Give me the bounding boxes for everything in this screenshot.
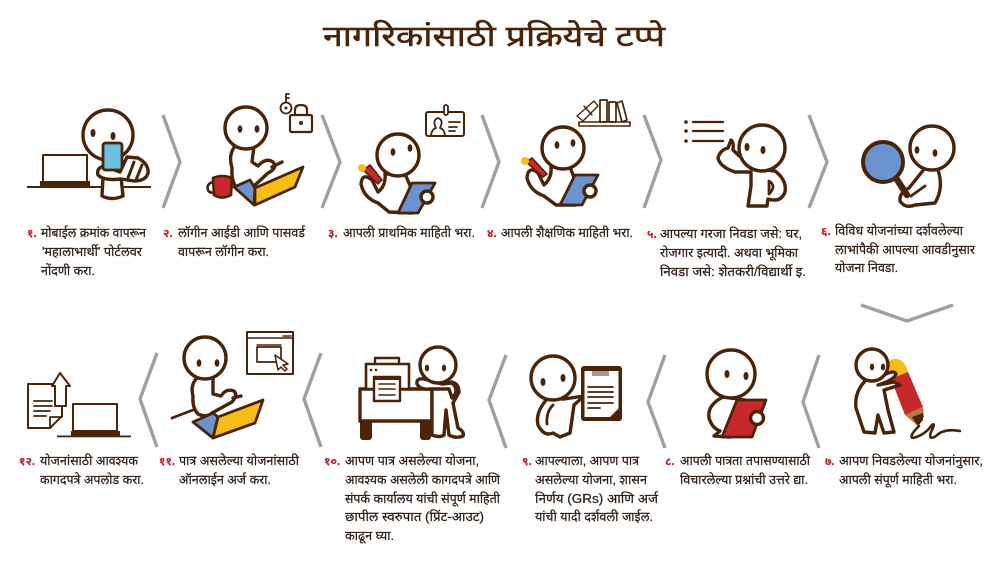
text: step 1 bbox=[27, 225, 147, 278]
icon: step 2 person with laptop, cup, key and lock bbox=[208, 94, 312, 205]
text: step 10: काढून घ्या. bbox=[345, 528, 394, 544]
text: step 11 bbox=[159, 453, 300, 487]
text: step 1: १. bbox=[27, 228, 37, 240]
icon: step 7 person with giant pencil bbox=[856, 349, 960, 438]
text: step 1: नोंदणी करा. bbox=[41, 263, 95, 278]
arrow: step 5 to 6 bbox=[809, 115, 827, 208]
icon: step 3 person with pencil, tablet, id card bbox=[358, 105, 464, 213]
text: step 1: मोबाईल क्रमांक वापरून bbox=[41, 225, 147, 240]
icon: step 12 document upload to laptop bbox=[28, 373, 131, 437]
icon: step 11 person at laptop with browser window bbox=[172, 332, 293, 438]
text: step 11: ११. bbox=[159, 456, 175, 468]
text: step 6: योजना निवडा. bbox=[835, 260, 898, 275]
icon: step 1 person with phone and laptop bbox=[27, 110, 151, 198]
text: step 9: असलेल्या योजना, शासन bbox=[535, 472, 648, 487]
arrow: step 7 to 8 bbox=[803, 355, 819, 448]
text: step 5: आपल्या गरजा निवडा जसे: घर, bbox=[660, 226, 802, 241]
text: step 4: ४. bbox=[487, 228, 497, 240]
text: step 1: 'महालाभार्थी' पोर्टलवर bbox=[42, 244, 143, 259]
text: step 2: वापरून लॉगीन करा. bbox=[178, 244, 269, 259]
text: step 7: ७. bbox=[825, 456, 835, 468]
arrow: step 4 to 5 bbox=[644, 115, 661, 208]
text: step 8: ८. bbox=[665, 456, 675, 468]
icon: step 5 person with list bbox=[684, 120, 785, 206]
text: step 2: लॉगीन आईडी आणि पासवर्ड bbox=[178, 225, 306, 240]
icon: step 10 person leaning on printer desk bbox=[360, 347, 463, 440]
text: step 11: ऑनलाईन अर्ज करा. bbox=[179, 472, 271, 487]
text: step 10: आपण पात्र असलेल्या योजना, bbox=[345, 453, 479, 468]
arrow: step 9 to 10 bbox=[489, 355, 506, 448]
text: step 11: पात्र असलेल्या योजनांसाठी bbox=[179, 453, 300, 468]
text: step 2 bbox=[163, 225, 306, 259]
icon: step 8 person with red tablet bbox=[707, 350, 766, 437]
text: step 5: निवडा जसे: शेतकरी/विद्यार्थी इ. bbox=[660, 264, 806, 279]
icon: step 9 person with clipboard bbox=[531, 356, 622, 437]
text: step 6 bbox=[821, 223, 976, 275]
text: step 5: रोजगार इत्यादी. अथवा भूमिका bbox=[660, 245, 799, 261]
text: step 7: आपली संपूर्ण माहिती भरा. bbox=[839, 472, 957, 488]
arrow: step 11 to 12 bbox=[140, 353, 157, 447]
icon: step 6 person with magnifier bbox=[863, 126, 954, 206]
text: step 6: ६. bbox=[821, 226, 831, 238]
text: step 9: यांची यादी दर्शवली जाईल. bbox=[535, 509, 653, 524]
text: step 8: विचारलेल्या प्रश्नांची उत्तरे द्या. bbox=[680, 472, 808, 487]
text: step 12 bbox=[19, 453, 144, 487]
text: step 9 bbox=[522, 453, 659, 524]
text: step 10: आवश्यक असलेली कागदपत्रे आणि bbox=[345, 472, 501, 487]
text: step 10: १०. bbox=[324, 456, 340, 468]
text: step 12: १२. bbox=[19, 456, 35, 468]
arrow: step 8 to 9 bbox=[648, 355, 665, 448]
text: step 4: आपली शैक्षणिक माहिती भरा. bbox=[501, 225, 633, 240]
arrow: step 6 down to 7 bbox=[861, 305, 953, 321]
arrow: step 2 to 3 bbox=[322, 115, 340, 208]
text: step 12: योजनांसाठी आवश्यक bbox=[40, 453, 139, 468]
text: step 9: निर्णय (GRs) आणि अर्ज bbox=[535, 491, 659, 506]
text: step 12: कागदपत्रे अपलोड करा. bbox=[40, 472, 144, 487]
text: step 7: आपण निवडलेल्या योजनांनुसार, bbox=[839, 453, 983, 469]
text: step 6: लाभांपैकी आपल्या आवडीनुसार bbox=[835, 242, 976, 258]
text: step 8: आपली पात्रता तपासण्यासाठी bbox=[680, 453, 811, 468]
text: step 9: ९. bbox=[522, 456, 532, 468]
text: step 10: छापील स्वरुपात (प्रिंट-आउट) bbox=[345, 509, 484, 524]
text: step 8 bbox=[665, 453, 811, 487]
arrow: step 1 to 2 bbox=[163, 115, 180, 208]
arrow: step 3 to 4 bbox=[482, 115, 499, 208]
text: step 5 bbox=[647, 226, 806, 279]
text: step 10 bbox=[324, 453, 501, 544]
icon: step 4 person with pencil, tablet, books bbox=[521, 100, 630, 205]
text: step 10: संपर्क कार्यालय यांची संपूर्ण माहिती bbox=[345, 491, 501, 507]
text: step 3: ३. bbox=[328, 228, 338, 240]
arrow: step 10 to 11 bbox=[304, 353, 321, 447]
text: step 3: आपली प्राथमिक माहिती भरा. bbox=[343, 225, 475, 240]
text: step 2: २. bbox=[163, 228, 173, 240]
text: step 7 bbox=[825, 453, 983, 488]
text: step 5: ५. bbox=[647, 229, 657, 241]
text: step 6: विविध योजनांच्या दर्शवलेल्या bbox=[835, 223, 964, 238]
text: step 9: आपल्याला, आपण पात्र bbox=[535, 453, 640, 468]
title: नागरिकांसाठी प्रक्रियेचे टप्पे bbox=[323, 20, 666, 53]
